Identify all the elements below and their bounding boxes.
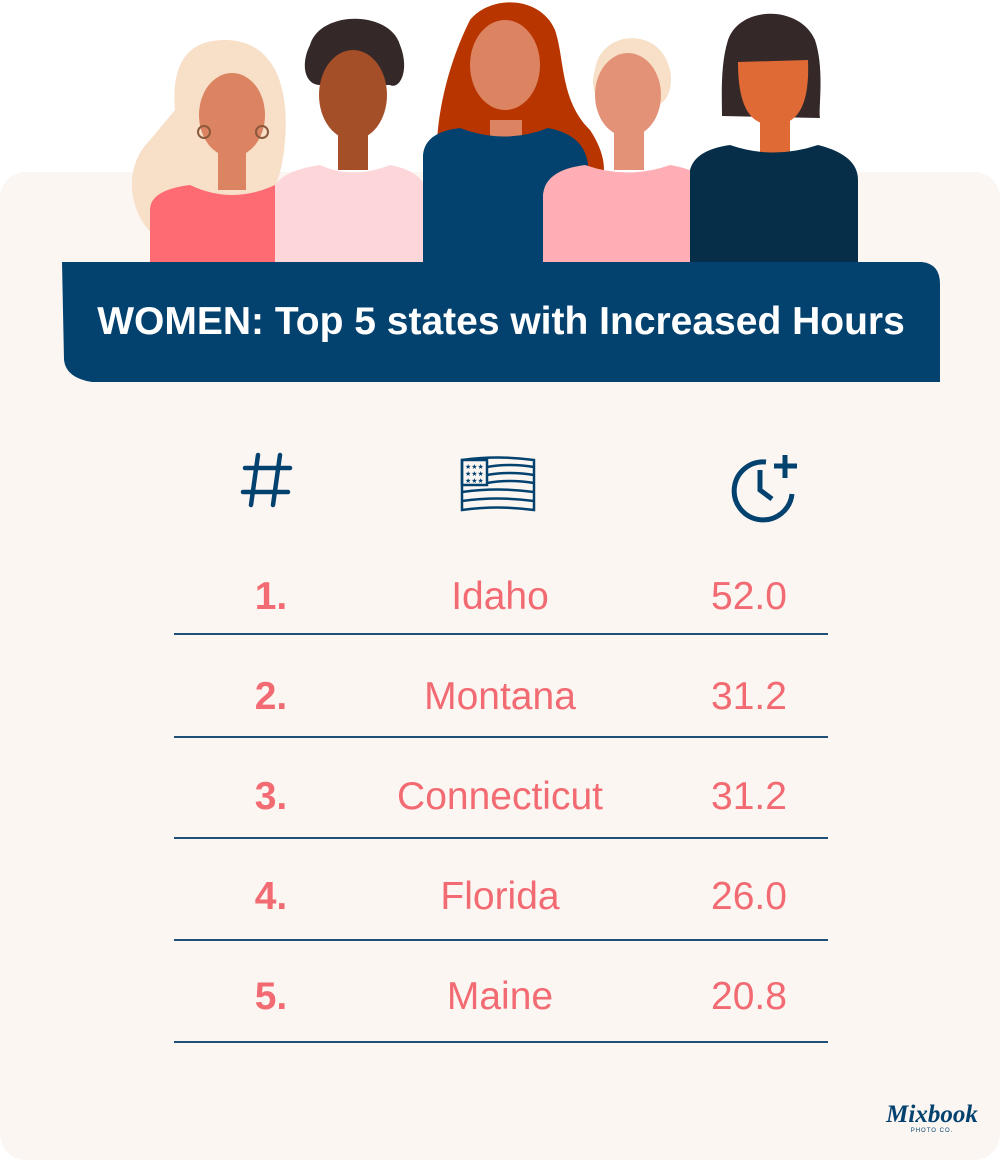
icon: hash [240, 452, 292, 508]
woman 1 [132, 40, 314, 262]
icon: clock plus [732, 455, 797, 522]
logo: PHOTO CO. [911, 1128, 953, 1134]
illustration: five women [132, 2, 858, 262]
text: Montana [424, 675, 576, 718]
text: 26.0 [711, 875, 787, 918]
woman 4 [543, 38, 713, 262]
icon: flag: ★★★ [465, 477, 484, 485]
text: 2. [255, 675, 287, 718]
icon: flag: ★★★ [465, 470, 484, 478]
table rows: 1. [255, 575, 287, 618]
text: 4. [255, 875, 287, 918]
text: 31.2 [711, 675, 787, 718]
table rows: Idaho [451, 575, 549, 618]
title text: WOMEN: Top 5 states with Increased Hours [97, 300, 905, 343]
icon: flag [460, 456, 536, 512]
title banner [62, 262, 940, 382]
woman 5 [690, 14, 858, 262]
text: Florida [440, 875, 560, 918]
woman 2 [275, 19, 428, 262]
logo: Mixbook [886, 1101, 978, 1128]
text: Connecticut [397, 775, 603, 818]
woman 3 [423, 2, 604, 262]
table rows [255, 575, 787, 618]
text: 20.8 [711, 975, 787, 1018]
table rows: 52.0 [711, 575, 787, 618]
text: 3. [255, 775, 287, 818]
icon: flag: ★★★ [465, 463, 484, 471]
text: 31.2 [711, 775, 787, 818]
text: 5. [255, 975, 287, 1018]
text: Maine [447, 975, 553, 1018]
